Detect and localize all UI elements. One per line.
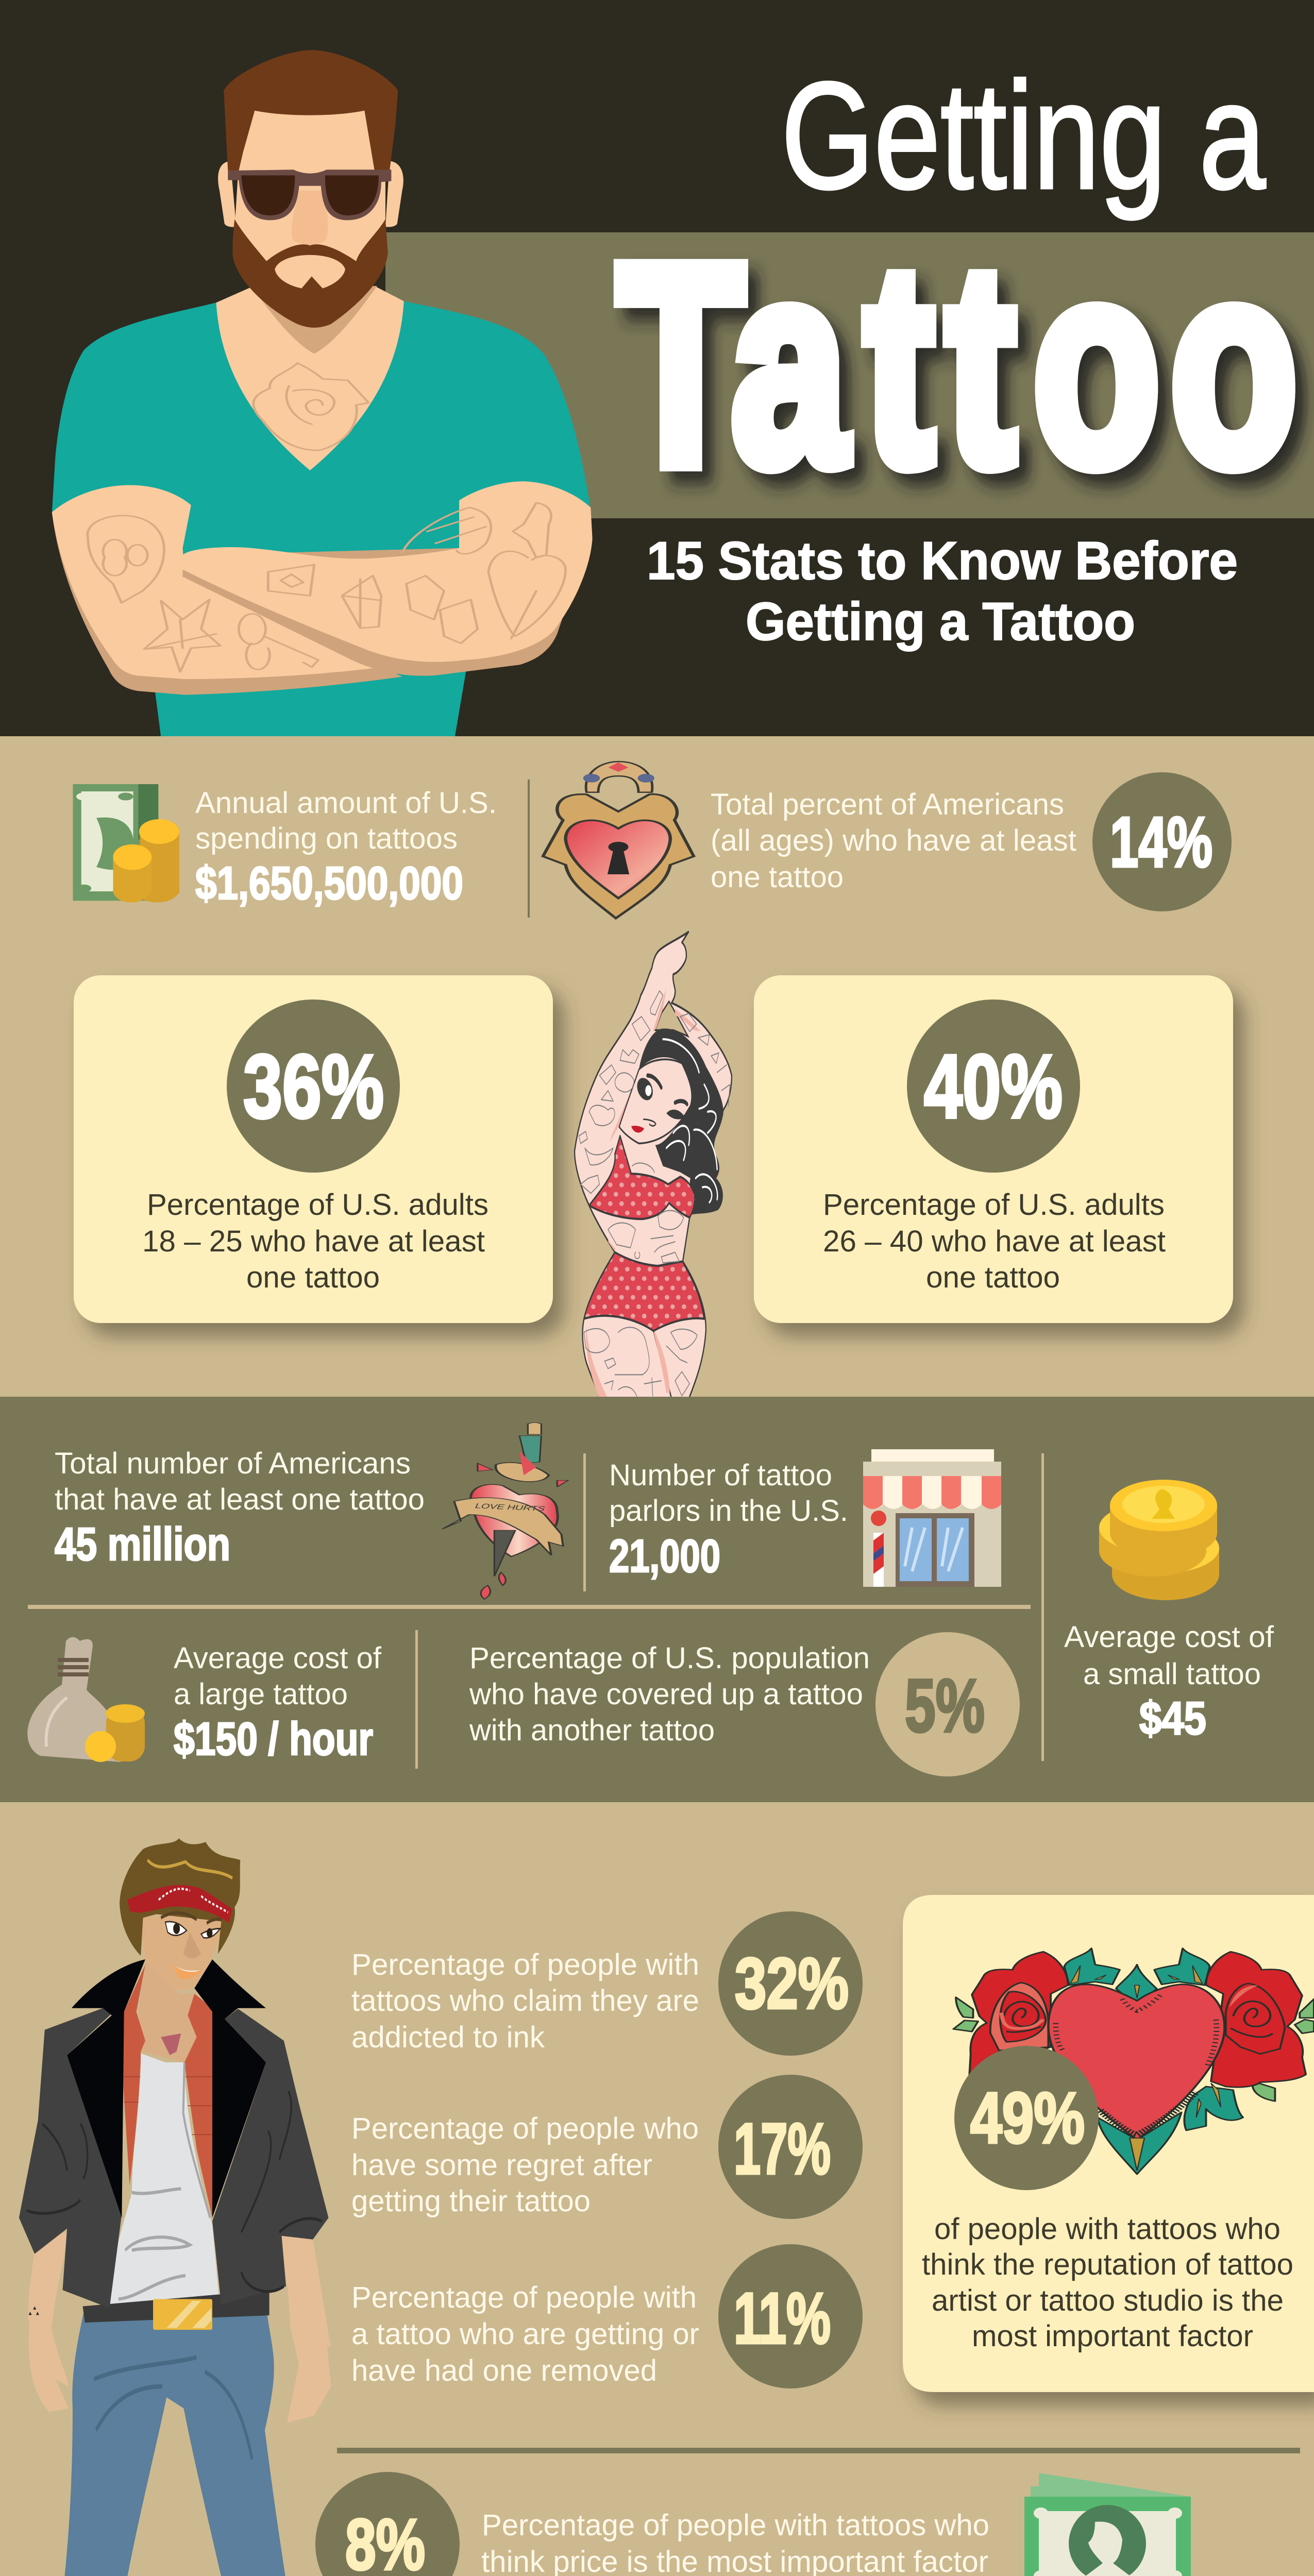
card: 49 percent reputation: most important factor	[972, 2319, 1253, 2353]
subtitle: 15 Stats to Know Before	[647, 531, 1238, 591]
stat: covered up tattoo	[469, 1632, 1020, 1776]
legs, hands and shoes	[18, 2226, 341, 2576]
stat: large tattoo cost	[174, 1641, 382, 1765]
tattoos	[254, 363, 368, 450]
stat: covered up tattoo: with another tattoo	[469, 1714, 715, 1747]
card: 49 percent reputation: artist or tattoo studio is the	[932, 2284, 1284, 2317]
left arm	[52, 485, 402, 695]
icon: heart with roses	[953, 1948, 1314, 2174]
card: 36 percent: Percentage of U.S. adults	[147, 1188, 488, 1222]
stat: 21,000 parlors	[609, 1459, 848, 1582]
card: 49 percent reputation: 49%	[970, 2077, 1085, 2158]
stat: 11 percent removed: Percentage of people with	[351, 2281, 697, 2314]
icon: money bag	[27, 1637, 145, 1762]
stat: 11 percent removed: a tattoo who are getting or	[351, 2317, 699, 2351]
stat: 17 percent regret: Percentage of people who	[351, 2112, 699, 2145]
upper body and head	[19, 1838, 331, 2348]
stat: percent of Americans with tattoo: Total percent of Americans	[711, 788, 1064, 821]
stat: 11 percent removed: 11%	[734, 2278, 831, 2359]
stat: small tattoo cost: Average cost of	[1064, 1620, 1274, 1654]
stat: small tattoo cost: $45	[1139, 1693, 1206, 1744]
stat: large tattoo cost: Average cost of	[174, 1641, 382, 1675]
stat: percent of Americans with tattoo	[711, 772, 1232, 911]
stat: 32 percent addicted	[351, 1911, 863, 2056]
stat: 32 percent addicted: tattoos who claim they are	[351, 1984, 699, 2018]
right arm	[182, 534, 591, 676]
panel: header	[0, 0, 1314, 737]
icon: heart padlock	[543, 761, 694, 918]
card: 40 percent: 40%	[924, 1037, 1063, 1137]
stat: percent of Americans with tattoo: one tattoo	[711, 860, 844, 894]
stat: 45 million: Total number of Americans	[55, 1447, 411, 1480]
subtitle: Getting a Tattoo	[746, 592, 1135, 652]
card: 40 percent: 26 – 40 who have at least	[823, 1225, 1166, 1258]
stat: 17 percent regret	[351, 2075, 863, 2219]
stat: covered up tattoo: Percentage of U.S. population	[469, 1641, 870, 1675]
stat: 45 million: 45 million	[55, 1519, 230, 1570]
stat: percent of Americans with tattoo: 14%	[1110, 803, 1212, 882]
stat: 17 percent regret: 17%	[734, 2108, 831, 2189]
illustration: pin-up woman with tattoos	[575, 932, 732, 1399]
card: 36 percent: 36%	[243, 1037, 384, 1137]
stat: small tattoo cost: a small tattoo	[1083, 1657, 1261, 1691]
panel: counts and costs	[0, 1397, 1314, 1803]
stat: 45 million	[55, 1447, 425, 1570]
illustration: man in leather jacket and jeans	[18, 1838, 341, 2576]
icon: dollar bill	[1024, 2473, 1191, 2576]
card: 36 percent: one tattoo	[246, 1261, 380, 1294]
heading: Tattoo: Tattoo	[618, 207, 1297, 523]
stat: large tattoo cost: a large tattoo	[174, 1677, 348, 1711]
icon: dagger through heart, love hurts	[443, 1422, 568, 1599]
card: 40 percent: one tattoo	[926, 1261, 1060, 1294]
stat: 21,000 parlors: 21,000	[609, 1531, 720, 1582]
stat: small tattoo cost	[1064, 1620, 1274, 1744]
header olive band	[385, 232, 1314, 518]
stat: annual spending	[195, 786, 497, 909]
card: 49 percent reputation: think the reputation of tattoo	[922, 2248, 1293, 2281]
illustration: bearded man with crossed tattooed arms	[52, 50, 593, 736]
stat: 21,000 parlors: parlors in the U.S.	[609, 1494, 848, 1528]
stat: covered up tattoo: who have covered up a tattoo	[469, 1677, 863, 1711]
stat: 17 percent regret: have some regret after	[351, 2148, 652, 2182]
card: 36 percent	[74, 975, 553, 1323]
icon: tattoo shop	[863, 1449, 1001, 1587]
stat: annual spending: Annual amount of U.S.	[195, 786, 497, 820]
icon: stacked gold coins	[1099, 1480, 1219, 1600]
stat: 11 percent removed: have had one removed	[351, 2354, 657, 2387]
icon: cash and coins	[73, 784, 179, 903]
card: 49 percent reputation	[903, 1895, 1314, 2392]
stat: covered up tattoo: 5%	[905, 1664, 985, 1748]
icon: dagger through heart, love hurts: LOVE HURTS	[474, 1502, 547, 1513]
stat: large tattoo cost: $150 / hour	[174, 1714, 373, 1765]
card: 40 percent: Percentage of U.S. adults	[823, 1188, 1165, 1222]
stat: 8 percent price	[315, 2472, 989, 2576]
panel: opinions and regrets	[0, 1802, 1314, 2576]
stat: 45 million: that have at least one tattoo	[55, 1483, 425, 1516]
stat: annual spending: spending on tattoos	[195, 822, 458, 855]
card: 36 percent: 18 – 25 who have at least	[142, 1225, 485, 1258]
card: 40 percent	[754, 975, 1233, 1323]
stat: 32 percent addicted: 32%	[735, 1943, 849, 2024]
stat: 11 percent removed	[351, 2244, 863, 2388]
stat: 32 percent addicted: Percentage of people with	[351, 1948, 699, 1981]
stat: 8 percent price: Percentage of people with tattoos who	[482, 2509, 989, 2542]
stat: percent of Americans with tattoo: (all ages) who have at least	[711, 824, 1076, 857]
panel: national stats and age groups	[0, 736, 1314, 1399]
stat: 21,000 parlors: Number of tattoo	[609, 1459, 832, 1492]
card: 49 percent reputation: of people with tattoos who	[934, 2212, 1281, 2246]
subtitle	[647, 531, 1238, 652]
stat: 32 percent addicted: addicted to ink	[351, 2021, 545, 2054]
stat: annual spending: $1,650,500,000	[195, 858, 463, 909]
stat: 17 percent regret: getting their tattoo	[351, 2184, 591, 2218]
